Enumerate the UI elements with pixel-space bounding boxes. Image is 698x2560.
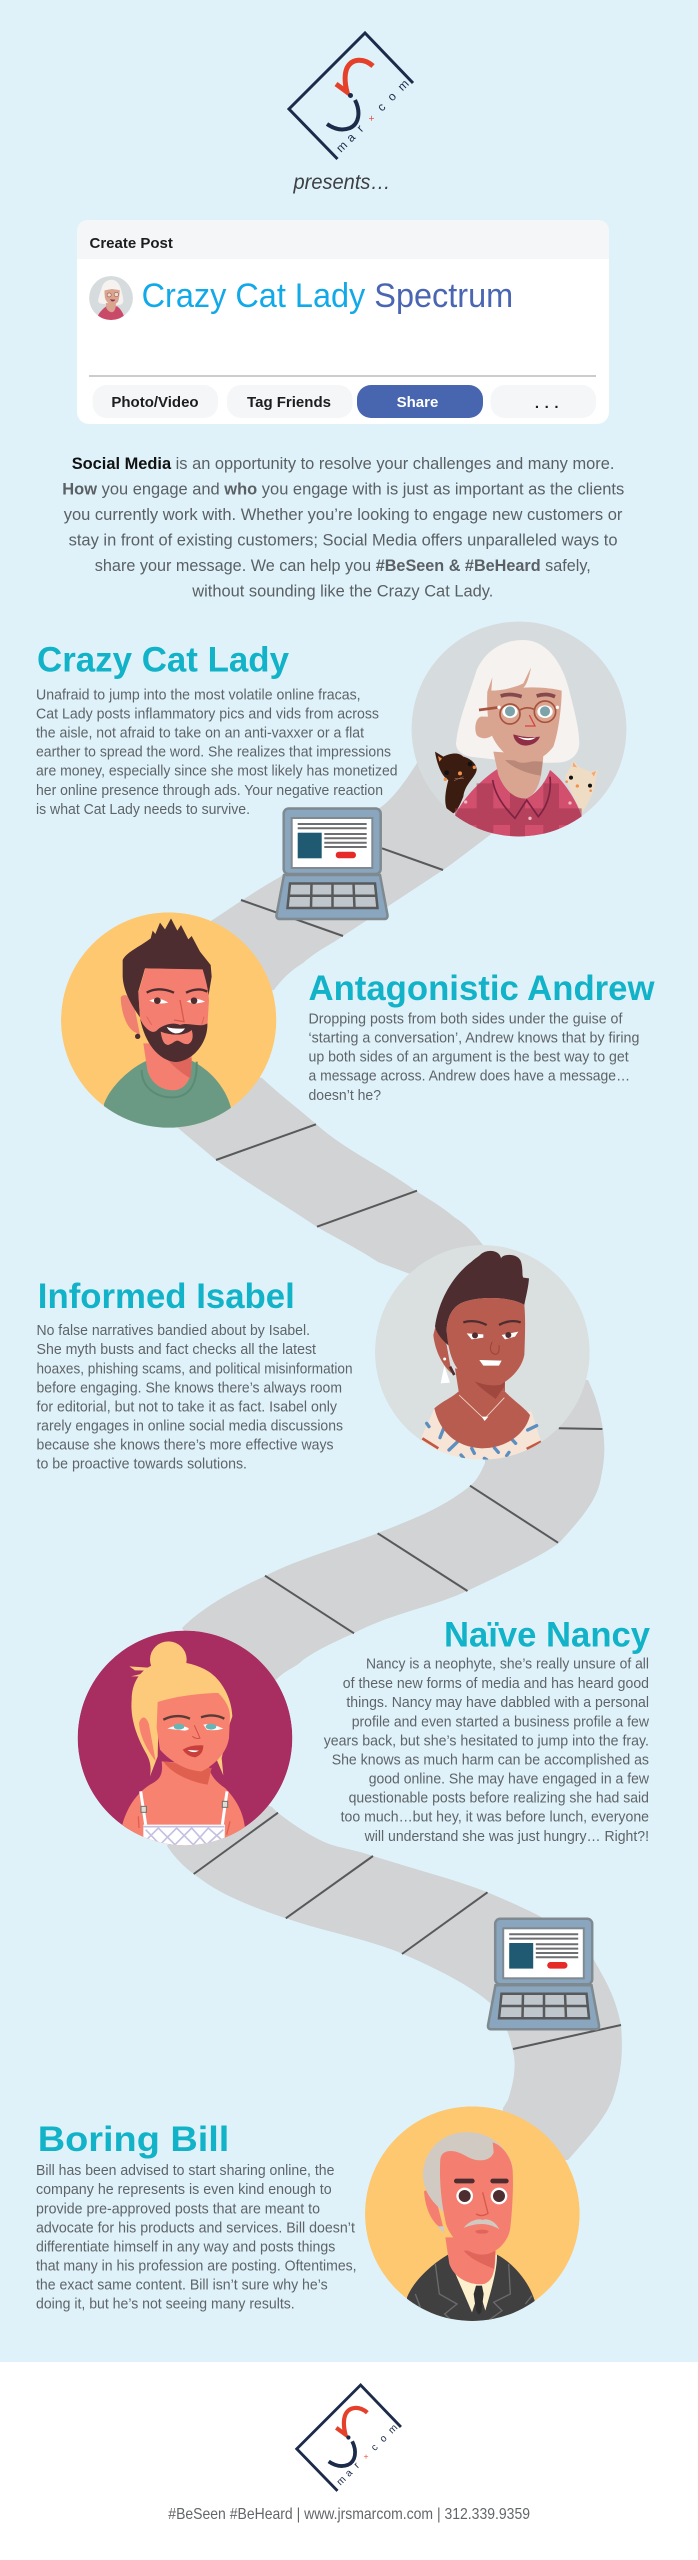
heading: informed isabel: Informed Isabel [38,1277,295,1316]
text: informed isabel description: hoaxes, phishing scams, and political misinformation [36,1361,352,1377]
text: antagonistic andrew description: Dropping posts from both sides under the guise of [308,1011,623,1027]
button: tag friends: Tag Friends [247,394,331,411]
shirt [456,769,582,836]
footer logo: com [369,2423,400,2453]
button: share: Share [397,394,438,411]
footer contact text: #BeSeen #BeHeard | www.jrsmarcom.com | 312.339.9359 [168,2506,530,2523]
text: naive nancy description: She knows as much harm can be accomplished as [332,1753,649,1769]
text: naive nancy description: Nancy is a neophyte, she’s really unsure of all [366,1656,649,1672]
card heading: Create Post [90,235,173,252]
text: naive nancy description: years back, but she’s hesitated to jump into the fray. [324,1734,649,1750]
footer background [0,2362,698,2560]
text: antagonistic andrew description: ‘starting a conversation’, Andrew knows that by firing [308,1031,639,1047]
text: boring bill description: the exact same content. Bill isn’t sure why he’s [36,2277,328,2293]
text: antagonistic andrew description: doesn’t he? [308,1088,381,1104]
logo: com [374,77,412,114]
text: crazy cat lady description: is what Cat Lady needs to survive. [36,802,250,818]
text: informed isabel description: because she knows there’s more effective ways [36,1437,334,1453]
text: informed isabel description: No false narratives bandied about by Isabel. [36,1323,310,1339]
text: boring bill description: that many in his profession are posting. Oftentimes, [36,2258,357,2274]
intro text: share your message. We can help you #BeSeen & #BeHeard safely, [95,556,591,575]
text: boring bill description: Bill has been advised to start sharing online, the [36,2163,334,2179]
text: informed isabel description: rarely engages in online social media discussions [36,1418,343,1434]
text: naive nancy description: of these new forms of media and has heard good [343,1676,649,1692]
text: naive nancy description [324,1656,650,1845]
cat: cream [565,760,598,813]
portrait: crazy cat lady [412,622,626,847]
portrait: boring bill [365,2106,580,2327]
text: crazy cat lady description: Cat Lady posts inflammatory pics and vids from across [36,706,379,722]
footer logo [297,2385,401,2491]
intro text: Social Media is an opportunity to resolve your challenges and many more. [72,454,614,473]
panel: create post card [77,220,609,424]
text: naive nancy description: questionable posts before realizing she had said [349,1791,649,1807]
text: naive nancy description: good online. She may have engaged in a few [369,1772,650,1788]
text: crazy cat lady description: her online presence through ads. Your negative reaction [36,783,383,799]
text: crazy cat lady description: Unafraid to jump into the most volatile online fracas, [36,687,361,703]
neck [493,752,543,798]
icon: laptop one [276,808,388,919]
text: boring bill description: company he represents is even kind enough to [36,2182,332,2198]
footer logo: mar [335,2460,363,2488]
intro text: How you engage and who you engage with is just as important as the clients [62,480,624,498]
text: boring bill description: doing it, but he’s not seeing many results. [36,2297,295,2313]
button: share [357,385,483,418]
text: informed isabel description: to be proactive towards solutions. [36,1456,247,1472]
text: crazy cat lady description: the aisle, not afraid to take on an anti-vaxxer or a flat [36,726,364,742]
button: photo video [93,385,218,418]
icon: mini avatar [89,276,133,322]
logo: × [366,113,377,124]
text: naive nancy description: too much…but hey, it was before lunch, everyone [341,1810,649,1826]
icon: laptop two [488,1919,599,2029]
button: tag friends [227,385,353,418]
intro text [62,454,624,601]
text: informed isabel description [36,1323,352,1472]
text: boring bill description: provide pre-approved posts that are meant to [36,2201,320,2217]
road path [150,750,622,2160]
intro text: stay in front of existing customers; Social Media offers unparalleled ways to [69,530,618,550]
ear [475,717,493,738]
cat: black [435,752,477,813]
text: boring bill description: advocate for his products and services. Bill doesn’t [36,2220,355,2236]
heading: antagonistic andrew: Antagonistic Andrew [308,969,655,1008]
card header [77,220,609,259]
text: crazy cat lady description: earther to spread the word. She realizes that impressions [36,745,391,761]
text: naive nancy description: things. Nancy may have dabbled with a personal [346,1695,649,1711]
heading: boring bill: Boring Bill [38,2120,229,2159]
heading: naive nancy: Naïve Nancy [444,1616,651,1655]
text: antagonistic andrew description: a message across. Andrew does have a message… [308,1069,630,1085]
road ties [194,848,621,2049]
card title: Crazy Cat Lady Spectrum [142,277,513,315]
logo [289,33,413,159]
face [487,667,562,763]
intro text: without sounding like the Crazy Cat Lady. [191,582,493,601]
footer logo: × [361,2452,371,2461]
text: crazy cat lady description [36,687,398,818]
text: boring bill description: differentiate himself in any way and posts things [36,2239,335,2255]
logo: mar [333,122,366,155]
button: photo video: Photo/Video [111,394,199,411]
text: informed isabel description: for editorial, but not to take it as fact. Isabel only [36,1399,338,1415]
text: naive nancy description: profile and even started a business profile a few [352,1715,650,1731]
glasses [479,701,559,724]
text: boring bill description [36,2163,357,2313]
text: informed isabel description: before engaging. She knows there’s always room [36,1380,342,1396]
button: more: ... [535,395,564,412]
portrait: antagonistic andrew [61,912,276,1133]
presents text: presents… [293,171,390,194]
text: antagonistic andrew description [308,1011,639,1104]
heading: crazy cat lady: Crazy Cat Lady [37,641,290,680]
text: antagonistic andrew description: up both sides of an argument is the best way to get [308,1050,629,1066]
button: more [491,385,596,418]
portrait: informed isabel [375,1245,590,1462]
text: naive nancy description: will understand she was just hungry… Right?! [364,1829,649,1845]
portrait: naive nancy [78,1631,292,1848]
text: crazy cat lady description: are money, especially since she most likely has monetized [36,764,398,780]
intro text: you currently work with. Whether you’re looking to engage new customers or [64,505,623,524]
text: informed isabel description: She myth busts and fact checks all the latest [36,1342,316,1358]
